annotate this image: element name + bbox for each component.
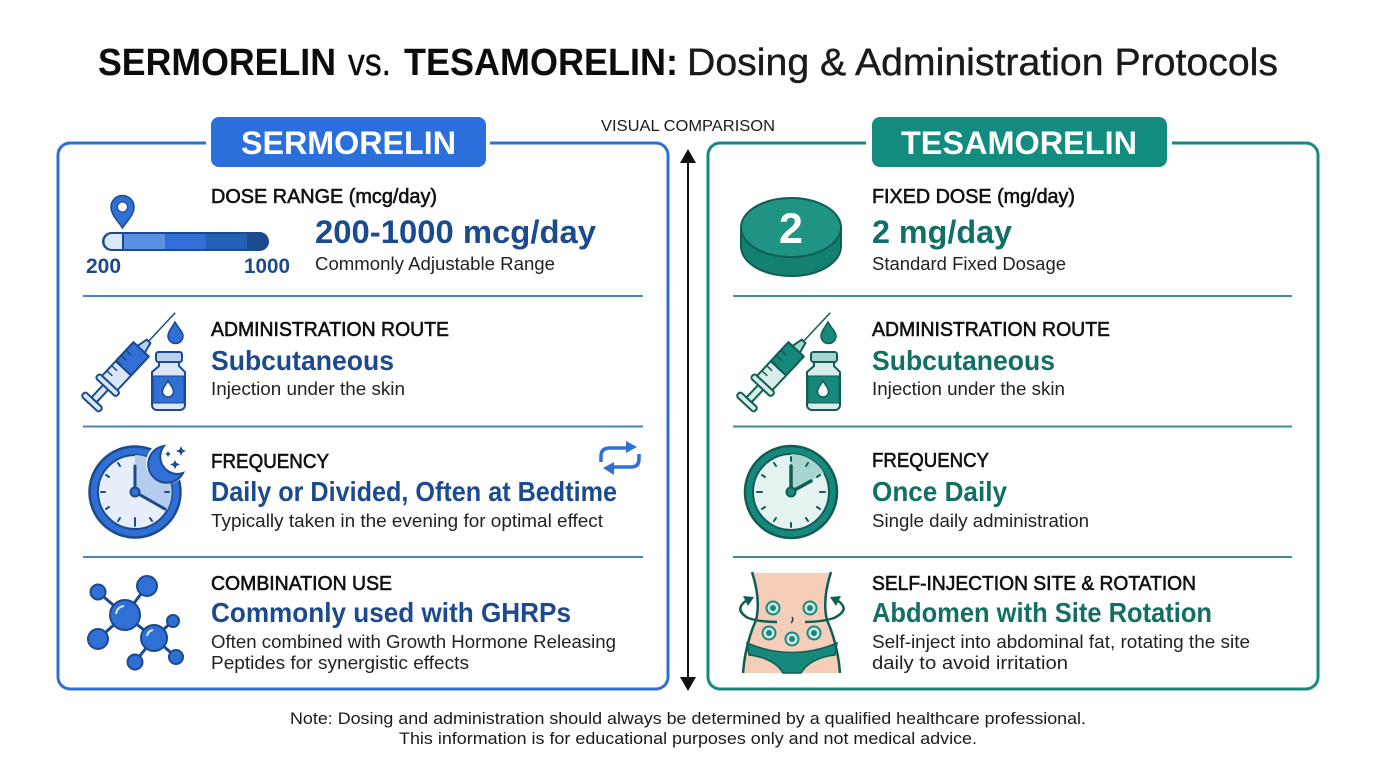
text: administration route: Subcutaneous bbox=[872, 345, 1055, 376]
text: frequency: FREQUENCY bbox=[872, 450, 989, 472]
text: dose range: DOSE RANGE (mcg/day) bbox=[211, 186, 437, 208]
double-headed arrow bbox=[680, 149, 696, 691]
badge: sermorelin: SERMORELIN bbox=[241, 125, 456, 161]
icon: abdomen injection sites bbox=[740, 572, 844, 673]
text: self-injection site: daily to avoid irritation bbox=[872, 653, 1068, 673]
icon: syringe and vial bbox=[735, 303, 840, 414]
panel: sermorelin bbox=[58, 117, 668, 689]
text: fixed dose bbox=[872, 186, 1075, 274]
title bbox=[98, 42, 1278, 84]
badge: tesamorelin bbox=[872, 117, 1167, 167]
text: combination use: Commonly used with GHRPs bbox=[211, 597, 571, 628]
text: combination use bbox=[211, 573, 616, 673]
text: self-injection site: Self-inject into abdominal fat, rotating the site bbox=[872, 632, 1250, 652]
title: TESAMORELIN: bbox=[404, 42, 678, 84]
icon: tablet: 2 bbox=[779, 205, 803, 253]
visual comparison label: VISUAL COMPARISON bbox=[601, 118, 775, 135]
text: frequency bbox=[211, 451, 617, 531]
badge: sermorelin bbox=[211, 117, 486, 167]
text: frequency: Single daily administration bbox=[872, 511, 1089, 531]
icon: repeat arrows bbox=[601, 441, 639, 475]
title: vs. bbox=[348, 42, 391, 84]
text: fixed dose: 2 mg/day bbox=[872, 214, 1012, 250]
footnote: Note: Dosing and administration should always be determined by a qualified healthcare professional. bbox=[290, 709, 1086, 728]
footnote bbox=[290, 709, 1086, 748]
text: administration route bbox=[872, 319, 1110, 399]
icon: clock bbox=[745, 446, 837, 538]
text: frequency: Typically taken in the evening for optimal effect bbox=[211, 511, 603, 531]
text: administration route: ADMINISTRATION ROUTE bbox=[211, 319, 449, 341]
text: dose range bbox=[211, 186, 596, 274]
icon: bedtime clock bbox=[90, 442, 188, 538]
text: self-injection site bbox=[872, 573, 1250, 673]
text: frequency: Once Daily bbox=[872, 476, 1007, 507]
text: self-injection site: SELF-INJECTION SITE & ROTATION bbox=[872, 573, 1196, 595]
icon: dose range bar bbox=[86, 196, 290, 278]
icon: molecule bbox=[88, 576, 183, 670]
text: administration route bbox=[211, 319, 449, 399]
text: administration route: ADMINISTRATION ROUTE bbox=[872, 319, 1110, 341]
text: administration route: Injection under the skin bbox=[211, 379, 405, 399]
text: self-injection site: Abdomen with Site Rotation bbox=[872, 597, 1212, 628]
text: combination use: COMBINATION USE bbox=[211, 573, 392, 595]
text: combination use: Peptides for synergistic effects bbox=[211, 653, 469, 673]
text: dose range: 200-1000 mcg/day bbox=[315, 214, 596, 250]
footnote: This information is for educational purposes only and not medical advice. bbox=[399, 729, 977, 748]
text: fixed dose: Standard Fixed Dosage bbox=[872, 254, 1066, 274]
badge: tesamorelin: TESAMORELIN bbox=[901, 125, 1137, 161]
title: SERMORELIN bbox=[98, 42, 336, 84]
text: administration route: Injection under the skin bbox=[872, 379, 1065, 399]
text: frequency bbox=[872, 450, 1089, 531]
icon: dose range bar: 200 bbox=[86, 255, 121, 278]
text: administration route: Subcutaneous bbox=[211, 345, 394, 376]
icon: dose range bar: 1000 bbox=[244, 255, 290, 278]
text: dose range: Commonly Adjustable Range bbox=[315, 254, 555, 274]
text: fixed dose: FIXED DOSE (mg/day) bbox=[872, 186, 1075, 208]
icon: tablet bbox=[741, 198, 841, 276]
text: frequency: Daily or Divided, Often at Bedtime bbox=[211, 476, 617, 507]
title: Dosing & Administration Protocols bbox=[687, 42, 1278, 84]
text: frequency: FREQUENCY bbox=[211, 451, 329, 473]
panel: tesamorelin bbox=[708, 117, 1318, 689]
text: combination use: Often combined with Growth Hormone Releasing bbox=[211, 632, 616, 652]
icon: syringe and vial bbox=[80, 303, 185, 414]
